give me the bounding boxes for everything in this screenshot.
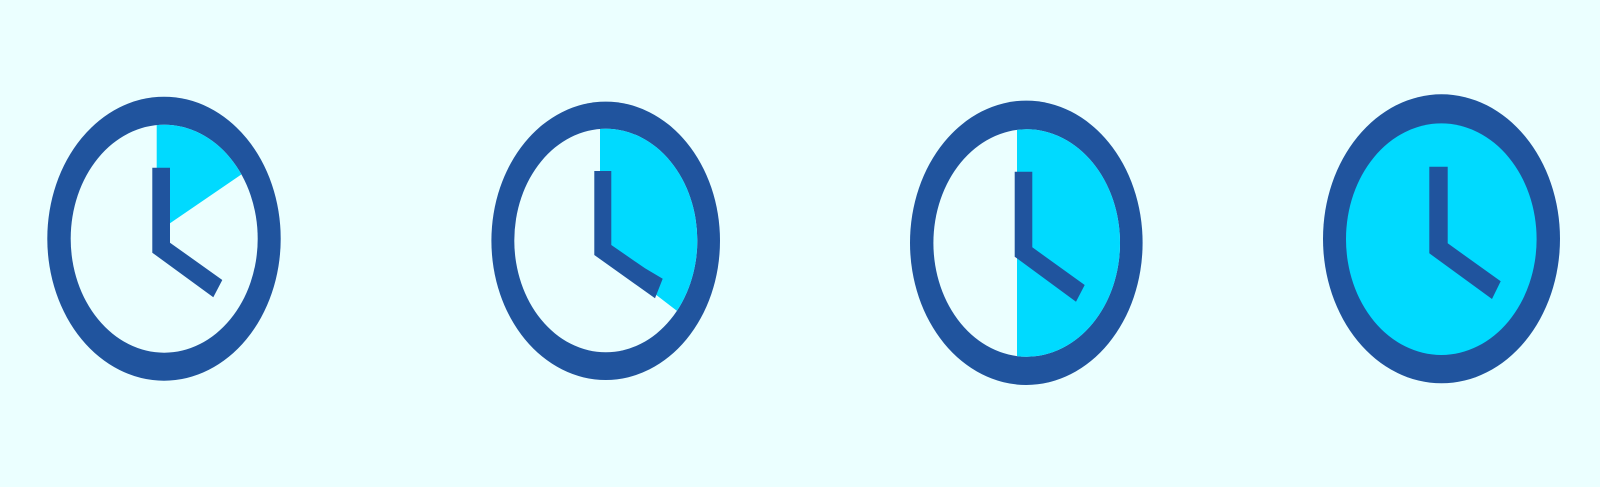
clock rim 3 bbox=[910, 101, 1143, 385]
clock face 3 bbox=[933, 129, 1120, 357]
clock hands 3 bbox=[1015, 172, 1085, 302]
clock hands 2 bbox=[594, 171, 663, 298]
clock face 2 bbox=[514, 129, 697, 352]
clock face 4 bbox=[1346, 123, 1537, 355]
clock rim 2 bbox=[491, 102, 720, 380]
clock 3: half filled bbox=[910, 101, 1143, 385]
wedge 3 bbox=[1017, 129, 1120, 357]
clock 1: one-sixth filled bbox=[47, 97, 281, 381]
clock 4: fully filled bbox=[1323, 94, 1560, 383]
wedge 2 bbox=[600, 128, 698, 311]
clock rim 4 bbox=[1323, 94, 1560, 383]
wedge 1 bbox=[156, 124, 242, 224]
clock face 1 bbox=[71, 125, 258, 353]
clock hands 4 bbox=[1429, 167, 1501, 299]
clock 2: one-third filled bbox=[491, 102, 720, 380]
clock rim 1 bbox=[47, 97, 281, 381]
clock hands 1 bbox=[152, 168, 222, 297]
